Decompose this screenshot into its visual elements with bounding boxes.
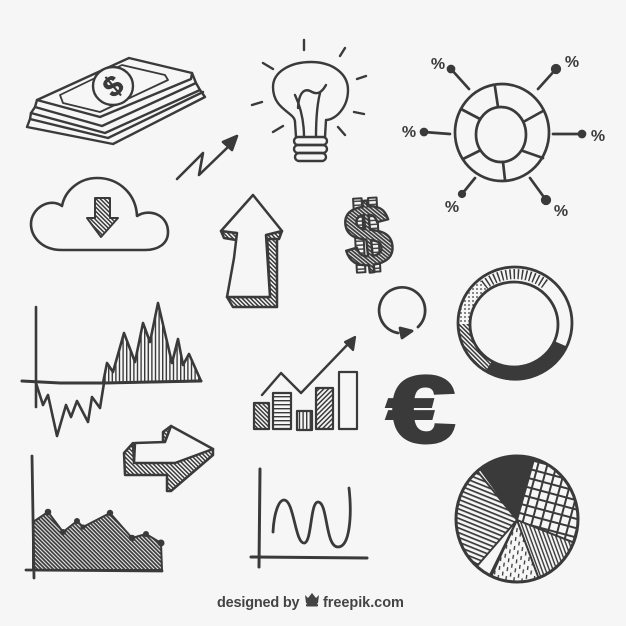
chart: segmented ring [458, 267, 572, 379]
icon: percent wheel diagram: % [554, 203, 568, 220]
icon: small zigzag arrow [177, 136, 237, 179]
chart: wave line graph [251, 469, 367, 567]
chart: bars with rising arrow [254, 337, 357, 430]
footer credit: freepik.com [323, 595, 404, 611]
chart: pie with hatched slices [454, 454, 580, 584]
icon: freepik logo [305, 593, 319, 606]
icon: stack of money: $ [97, 69, 130, 104]
icon: percent wheel diagram: % [431, 56, 445, 73]
chart: hatched area graph with points [26, 456, 164, 578]
icon: percent wheel diagram: % [402, 124, 416, 141]
icon: percent wheel diagram: % [591, 128, 605, 145]
icon: light bulb [252, 40, 366, 161]
icon: cloud download [31, 178, 168, 250]
icon: stack of money [27, 58, 205, 144]
icon: circular arrow [379, 287, 425, 338]
icon: dollar sign: $ [339, 184, 398, 287]
icon: euro sign: € [387, 357, 455, 463]
icon: percent wheel diagram [402, 54, 605, 220]
icon: percent wheel diagram: % [565, 54, 579, 71]
icon: 3d right arrow [124, 426, 213, 491]
icon: big up arrow [221, 195, 282, 307]
chart: positive and negative area graph [22, 303, 201, 436]
footer credit: designed by [217, 595, 300, 611]
icon: percent wheel diagram: % [445, 199, 459, 216]
footer credit [217, 593, 404, 611]
